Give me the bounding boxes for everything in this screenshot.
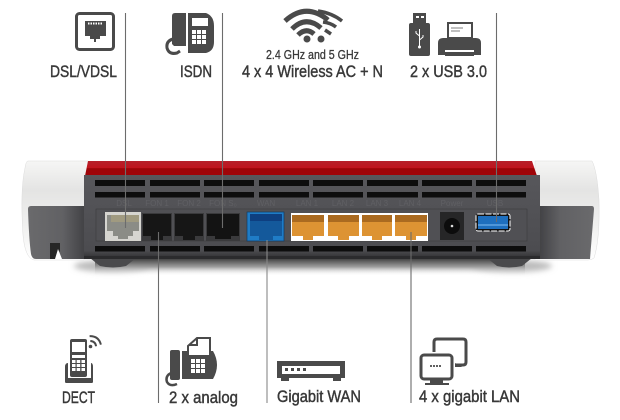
port labels: [116, 199, 503, 208]
FON S0 port: [206, 213, 240, 241]
LAN ports: [291, 213, 428, 241]
port labels: FON 1: [145, 199, 169, 208]
FON 1 port: [142, 213, 172, 241]
label: ISDN: ISDN: [180, 62, 212, 81]
right foot: [487, 258, 532, 268]
router: [22, 161, 599, 276]
port labels: LAN 2: [332, 199, 355, 208]
DSL port: [105, 212, 141, 241]
icon: WAN switch: [277, 361, 345, 381]
icon: printer: [438, 23, 481, 56]
left end cap: [22, 161, 88, 260]
port labels: LAN 1: [296, 199, 319, 208]
port labels: Power: [441, 199, 464, 208]
label: LAN: 4 x gigabit LAN: [419, 387, 520, 406]
vents: [95, 180, 526, 252]
icon: DECT handset: [65, 335, 101, 383]
red top: [85, 161, 537, 176]
port labels: USB: [487, 199, 503, 208]
FON 2 port: [174, 213, 204, 241]
icon: USB stick: [409, 13, 430, 56]
label: wireless: 4 x 4 Wireless AC + N: [242, 62, 383, 81]
label: analog: 2 x analog: [169, 388, 238, 407]
left foot: [90, 258, 136, 268]
USB port: [476, 214, 510, 231]
port labels: FON S₀: [209, 199, 237, 208]
right end cap: [535, 161, 599, 260]
label: DECT: DECT: [62, 388, 95, 407]
port labels: WAN: [257, 199, 275, 208]
port labels: FON 2: [177, 199, 201, 208]
label: USB: 2 x USB 3.0: [410, 62, 487, 81]
body: [84, 175, 540, 259]
icon: wifi: [285, 11, 342, 42]
connector lines: [126, 13, 496, 403]
icon: fax: [166, 338, 217, 385]
port panel: [96, 209, 527, 241]
icon: LAN monitors: [421, 339, 466, 385]
port labels: LAN 3: [366, 199, 389, 208]
icon: DSL socket: [76, 14, 114, 50]
port labels: DSL: [116, 199, 132, 208]
WAN port: [247, 212, 284, 241]
icon: ISDN phone: [167, 13, 214, 53]
floor shadow: [74, 258, 552, 276]
power port: [440, 212, 464, 240]
label: frequency: 2.4 GHz and 5 GHz: [266, 47, 359, 62]
label: DSL/VDSL: DSL/VDSL: [50, 62, 117, 81]
label: WAN: Gigabit WAN: [277, 387, 361, 406]
port labels: LAN 4: [399, 199, 422, 208]
